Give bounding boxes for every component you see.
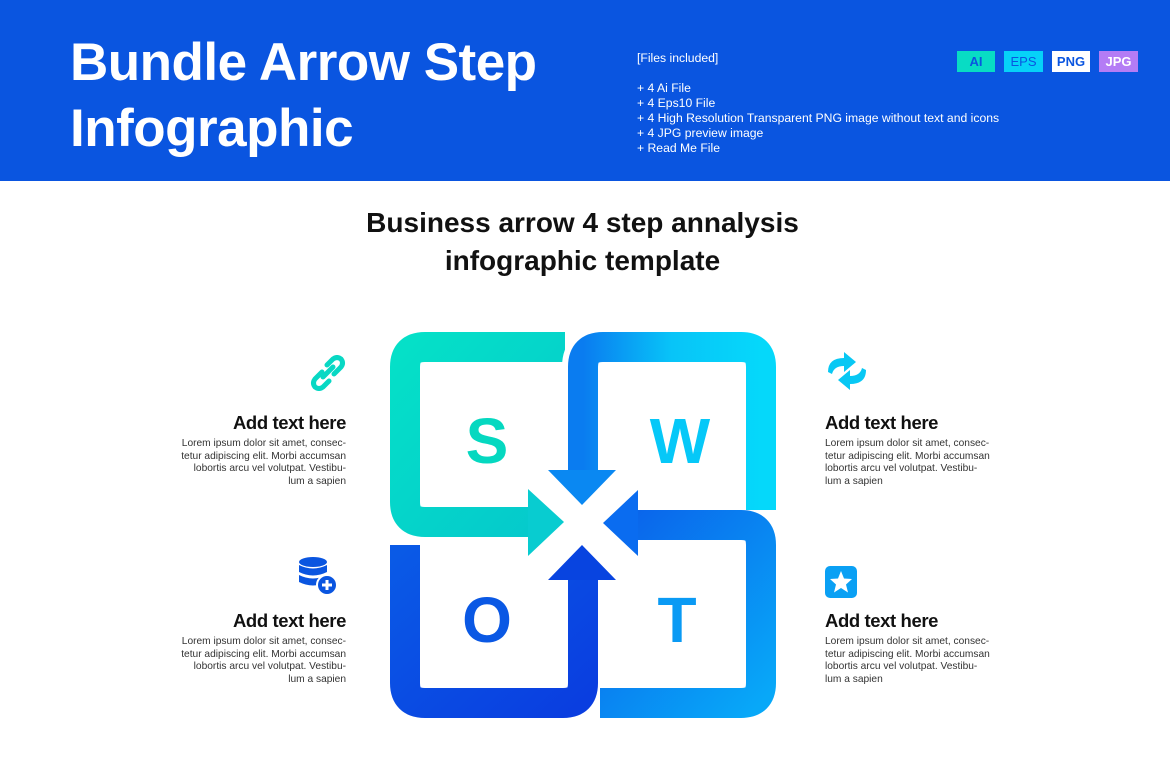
text block: bottom left: Lorem ipsum dolor sit amet, consec- <box>182 636 346 647</box>
text block: bottom left: tetur adipiscing elit. Morbi accumsan <box>181 648 346 660</box>
text block: bottom left: Add text here <box>233 610 346 631</box>
quadrant W <box>548 347 761 510</box>
text block: top left <box>181 412 346 486</box>
text block: top left: tetur adipiscing elit. Morbi accumsan <box>181 450 346 462</box>
text block: top left: lum a sapien <box>288 476 346 486</box>
quadrant O: O <box>462 584 512 656</box>
text block: bottom left: lum a sapien <box>288 674 346 684</box>
quadrant T: T <box>657 584 697 656</box>
quadrant S: S <box>466 405 508 477</box>
quadrant W: W <box>650 405 711 477</box>
text block: bottom right: Lorem ipsum dolor sit amet, consec- <box>825 636 989 647</box>
format badges: PNG <box>1057 54 1085 69</box>
files list: + 4 Eps10 File <box>637 96 715 110</box>
text block: top left: Add text here <box>233 412 346 433</box>
text block: top left: lobortis arcu vel volutpat. Vestibu- <box>194 463 346 474</box>
subtitle: infographic template <box>445 245 720 276</box>
files list: + 4 JPG preview image <box>637 126 763 140</box>
text block: top left: Lorem ipsum dolor sit amet, consec- <box>182 438 346 449</box>
title <box>70 33 537 158</box>
icon: database <box>299 557 336 594</box>
text block: bottom right: lum a sapien <box>825 674 883 684</box>
text block: top right: lobortis arcu vel volutpat. Vestibu- <box>825 463 977 474</box>
format badges <box>957 51 1138 72</box>
header banner <box>0 0 1170 181</box>
files list: + Read Me File <box>637 141 720 155</box>
format badges: JPG <box>1105 54 1132 69</box>
text block: top right <box>825 412 990 486</box>
text block: bottom right <box>825 610 990 684</box>
text block: top right: lum a sapien <box>825 476 883 486</box>
format badges: EPS <box>1010 54 1036 69</box>
text block: top right: Lorem ipsum dolor sit amet, consec- <box>825 438 989 449</box>
icon: link <box>310 355 346 391</box>
icon: sync arrows <box>828 352 866 390</box>
quadrant T <box>600 490 761 703</box>
quadrant O <box>405 545 616 703</box>
quadrant S <box>405 347 565 556</box>
title: Bundle Arrow Step <box>70 33 537 92</box>
text block: bottom right: lobortis arcu vel volutpat. Vestibu- <box>825 661 977 672</box>
text block: bottom left: lobortis arcu vel volutpat. Vestibu- <box>194 661 346 672</box>
title: Infographic <box>70 99 353 158</box>
subtitle <box>366 207 799 276</box>
format badges: AI <box>970 54 982 69</box>
text block: top right: tetur adipiscing elit. Morbi accumsan <box>825 450 990 462</box>
files list: [Files included] <box>637 51 718 65</box>
files list: + 4 Ai File <box>637 81 691 95</box>
icon: star <box>825 566 857 598</box>
text block: bottom right: tetur adipiscing elit. Morbi accumsan <box>825 648 990 660</box>
files list: + 4 High Resolution Transparent PNG image without text and icons <box>637 111 999 125</box>
text block: bottom left <box>181 610 346 684</box>
text block: top right: Add text here <box>825 412 938 433</box>
files list <box>637 51 999 155</box>
subtitle: Business arrow 4 step annalysis <box>366 207 799 238</box>
text block: bottom right: Add text here <box>825 610 938 631</box>
